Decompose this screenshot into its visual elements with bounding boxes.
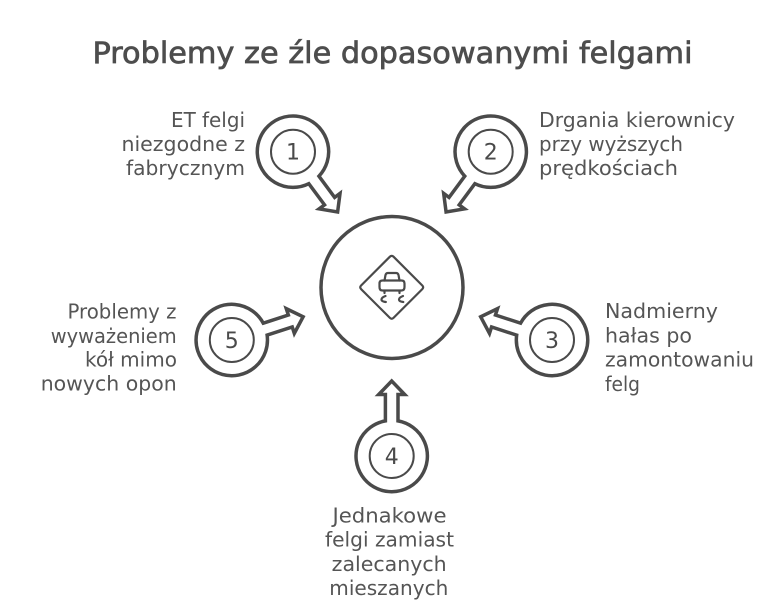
- label 1: fabrycznym: [126, 156, 245, 180]
- label 2: przy wyższych: [539, 132, 683, 156]
- ring and arrow 2: [417, 102, 541, 233]
- ring and arrow 3: [470, 283, 597, 385]
- label 5: Problemy z: [68, 300, 176, 324]
- label 2: prędkościach: [539, 156, 678, 180]
- number badge 5: [210, 318, 254, 362]
- number badge 3: 3: [545, 329, 559, 354]
- node 2 with arrow: [417, 102, 541, 233]
- label 1: niezgodne z: [122, 132, 245, 156]
- label 3: zamontowaniu: [605, 348, 754, 372]
- number badge 4: [370, 434, 414, 478]
- label 3: hałas po: [605, 324, 692, 348]
- label 5: [41, 300, 177, 396]
- label 5: kół mimo: [85, 348, 177, 372]
- number badge 1: [271, 130, 315, 174]
- number badge 5: 5: [225, 329, 239, 354]
- title: Problemy ze źle dopasowanymi felgami: [92, 36, 693, 70]
- node 4 with arrow: [356, 381, 427, 492]
- number badge 3: [530, 318, 574, 362]
- label 4: [325, 504, 454, 600]
- number badge 2: [469, 130, 513, 174]
- label 3: [605, 299, 754, 396]
- ring and arrow 4: [356, 381, 427, 492]
- central circle: [321, 216, 463, 358]
- central circle with icon: [321, 216, 463, 358]
- node 5 with arrow: [187, 283, 314, 385]
- label 5: nowych opon: [41, 372, 177, 396]
- label 4: mieszanych: [329, 576, 448, 600]
- label 4: Jednakowe: [330, 504, 446, 528]
- label 4: zalecanych: [332, 552, 447, 576]
- label 3: felg: [605, 372, 640, 396]
- label 3: Nadmierny: [605, 299, 718, 323]
- number badge 2: 2: [484, 141, 498, 166]
- label 1: [122, 108, 245, 180]
- number badge 4: 4: [385, 445, 399, 470]
- label 1: ET felgi: [171, 108, 245, 132]
- label 2: [539, 108, 735, 180]
- label 2: Drgania kierownicy: [539, 108, 735, 132]
- ring and arrow 5: [187, 283, 314, 385]
- number badge 1: 1: [286, 141, 300, 166]
- ring and arrow 1: [243, 102, 366, 233]
- node 3 with arrow: [470, 283, 597, 385]
- label 5: wyważeniem: [51, 324, 177, 348]
- node 1 with arrow: [243, 102, 366, 233]
- icon: slippery road sign: [360, 256, 423, 319]
- label 4: felgi zamiast: [325, 528, 454, 552]
